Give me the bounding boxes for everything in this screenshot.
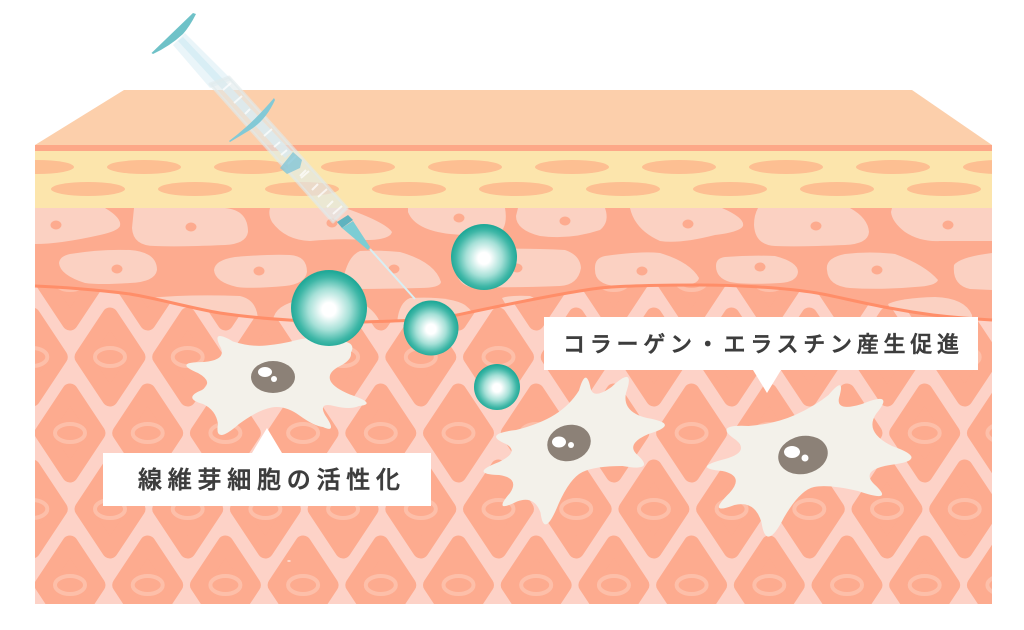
basement membrane line bbox=[35, 285, 992, 322]
syringe needle hub bbox=[342, 221, 370, 250]
syringe piston bbox=[280, 152, 302, 174]
syringe finger flange bbox=[229, 98, 275, 142]
fibroblast cell centre bbox=[484, 377, 665, 524]
skin surface bbox=[35, 90, 992, 145]
sphere upper bbox=[451, 224, 517, 290]
callout text: 線維芽細胞の活性化 bbox=[138, 467, 400, 494]
syringe plunger head bbox=[152, 13, 196, 54]
sphere middle bbox=[404, 300, 458, 356]
sphere small bbox=[474, 364, 520, 410]
syringe needle bbox=[370, 249, 415, 299]
syringe rod centre bbox=[178, 37, 292, 158]
panel: fat layer bbox=[0, 151, 1024, 208]
syringe hub ring bbox=[337, 215, 353, 228]
skin surface stripe bbox=[35, 145, 992, 151]
panel: dermis collagen lattice bbox=[35, 286, 992, 604]
callout text: コラーゲン・エラスチン産生促進 bbox=[563, 332, 959, 357]
panel: epidermal cell layer bbox=[35, 208, 992, 320]
callout: collagen elastin production bbox=[544, 317, 978, 393]
syringe plunger rod bbox=[173, 33, 232, 88]
fibroblast cell right bbox=[707, 385, 912, 537]
callout: fibroblast activation bbox=[103, 428, 431, 506]
syringe graduations bbox=[223, 83, 342, 214]
syringe barrel bbox=[210, 77, 347, 222]
sphere large bbox=[291, 270, 367, 346]
icon: syringe bbox=[152, 13, 415, 299]
fibroblast cell left bbox=[186, 336, 367, 435]
